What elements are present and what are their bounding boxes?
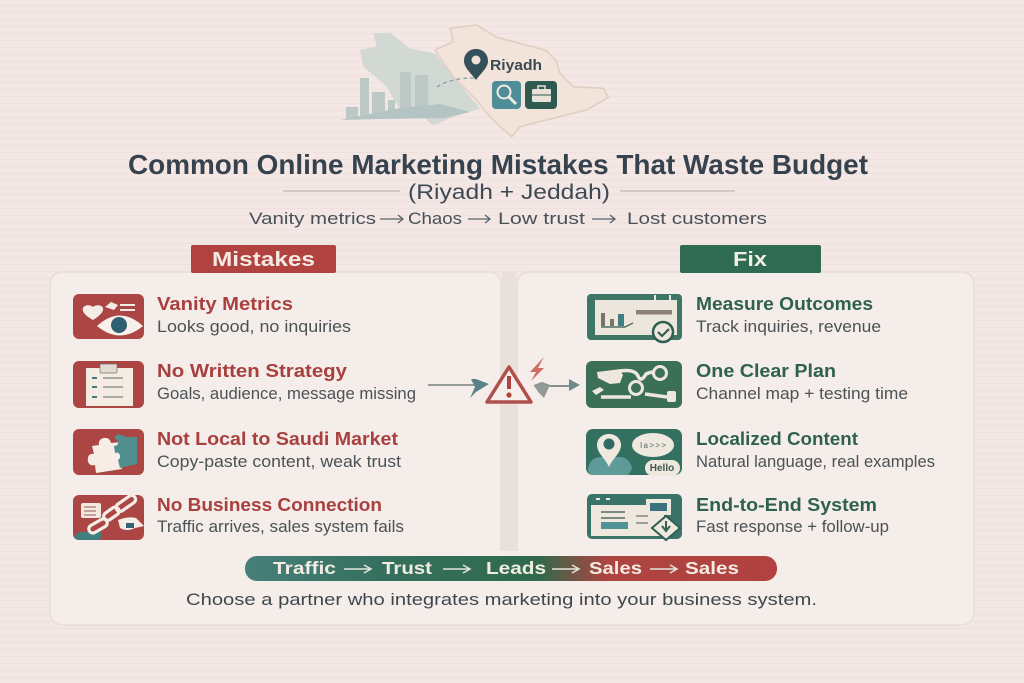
label: Riyadh: Riyadh bbox=[490, 57, 542, 74]
panel: fixes list bbox=[586, 293, 935, 540]
panel: fixes list: Channel map + testing time bbox=[696, 385, 908, 403]
skyline bbox=[340, 72, 470, 120]
tagline flow: Lost customers bbox=[627, 209, 767, 228]
text: No Written Strategy: No Written Strategy bbox=[157, 360, 348, 381]
subtitle: (Riyadh + Jeddah) bbox=[408, 181, 610, 204]
panel: fixes list: Track inquiries, revenue bbox=[696, 318, 881, 336]
panel: mistakes list bbox=[73, 293, 416, 540]
heading badge: Mistakes: Mistakes bbox=[212, 249, 315, 271]
icon: localized speech: Ia>>> bbox=[640, 441, 666, 450]
icon: localized speech: Hello bbox=[650, 463, 674, 474]
panel: mistakes list: Looks good, no inquiries bbox=[157, 318, 351, 336]
icon: measure dashboard bbox=[587, 294, 682, 342]
tagline flow: Vanity metrics bbox=[249, 209, 376, 228]
icon: lightning bolt bbox=[530, 357, 544, 381]
arrow: warning to fixes bbox=[534, 379, 580, 398]
tagline flow: Low trust bbox=[498, 209, 585, 228]
icon: vanity eye bbox=[73, 294, 144, 339]
icon: puzzle pieces bbox=[73, 429, 144, 475]
icon: end-to-end system bbox=[587, 494, 682, 540]
title: Common Online Marketing Mistakes That Waste Budget bbox=[128, 149, 868, 180]
text: Vanity Metrics: Vanity Metrics bbox=[157, 293, 293, 314]
text: One Clear Plan: One Clear Plan bbox=[696, 360, 836, 381]
panel: mistakes list: Goals, audience, message missing bbox=[157, 385, 416, 403]
text: No Business Connection: No Business Connection bbox=[157, 494, 382, 515]
icon: warning triangle bbox=[487, 367, 531, 402]
arrow: mistakes into warning bbox=[428, 379, 489, 398]
pipeline bar bbox=[245, 556, 777, 581]
text: Not Local to Saudi Market: Not Local to Saudi Market bbox=[157, 428, 398, 449]
text: Measure Outcomes: Measure Outcomes bbox=[696, 293, 873, 314]
panel: fixes list: Fast response + follow-up bbox=[696, 518, 889, 536]
icon: briefcase bbox=[525, 81, 557, 109]
icon: broken chain bbox=[73, 494, 144, 540]
heading badge: Mistakes bbox=[191, 245, 336, 273]
icon: localized speech bbox=[586, 429, 682, 476]
icon: channel map bbox=[586, 361, 682, 408]
tagline flow bbox=[249, 209, 767, 228]
pipeline bar: Trust bbox=[382, 558, 432, 578]
pipeline bar: Sales bbox=[685, 558, 739, 578]
closing message: Choose a partner who integrates marketing into your business system. bbox=[186, 590, 817, 609]
icon: location pin bbox=[464, 49, 488, 80]
text: Localized Content: Localized Content bbox=[696, 428, 858, 449]
icon: clipboard bbox=[73, 361, 144, 408]
map outline: Saudi Arabia bbox=[435, 25, 608, 137]
panel: outer content card bbox=[50, 272, 974, 625]
dashed route bbox=[437, 78, 474, 87]
panel: mistakes list: Copy-paste content, weak trust bbox=[157, 453, 401, 471]
tagline flow: Chaos bbox=[408, 209, 462, 228]
illustration: Saudi map with Riyadh pin bbox=[340, 25, 608, 137]
text: End-to-End System: End-to-End System bbox=[696, 494, 877, 515]
panel: fixes list: Natural language, real examples bbox=[696, 453, 935, 471]
pipeline bar: Sales bbox=[589, 558, 642, 578]
pipeline bar: Leads bbox=[486, 558, 546, 578]
map silhouette: muted west bbox=[360, 33, 480, 126]
icon: magnifier bbox=[492, 81, 521, 109]
heading badge: Fix bbox=[680, 245, 821, 273]
heading badge: Fix: Fix bbox=[733, 249, 767, 271]
panel: mistakes list: Traffic arrives, sales system fails bbox=[157, 518, 404, 536]
pipeline bar: Traffic bbox=[273, 558, 336, 578]
